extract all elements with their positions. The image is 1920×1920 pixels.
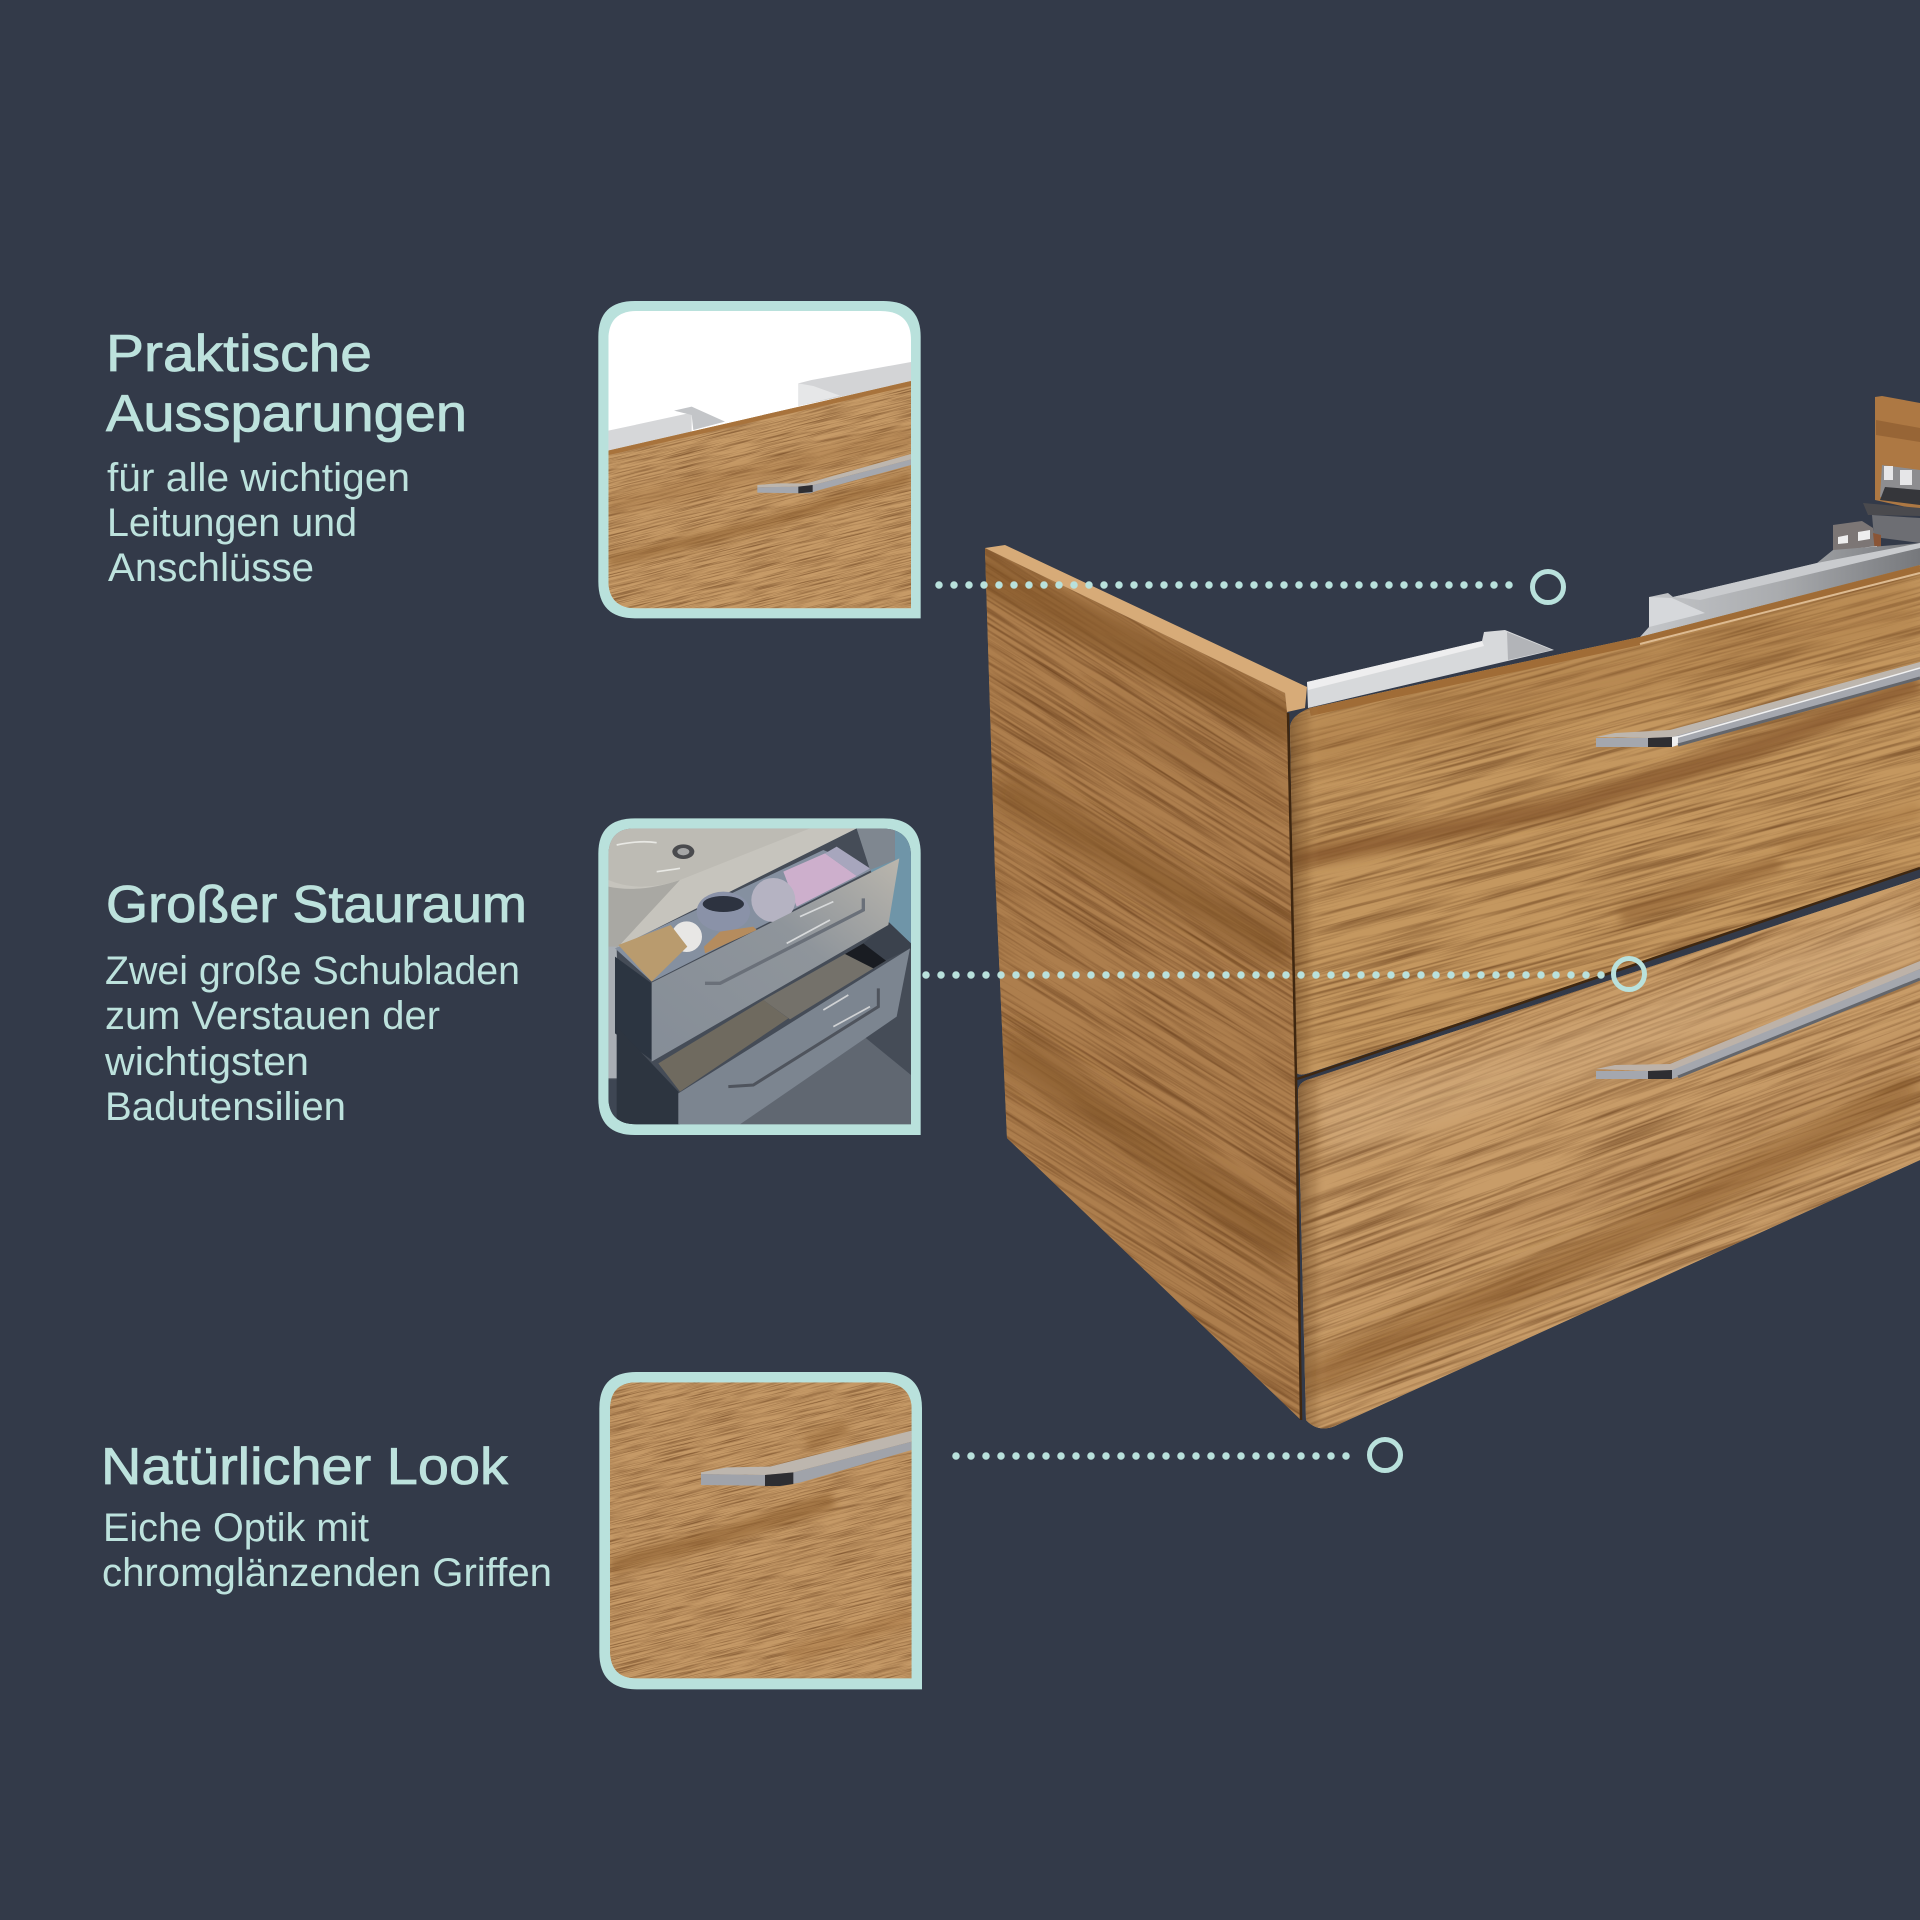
- description: [104, 949, 520, 1129]
- heading: Großer Stauraum: [106, 876, 527, 934]
- description: Leitungen und: [107, 501, 357, 545]
- description: chromglänzenden Griffen: [102, 1551, 552, 1595]
- upper drawer front: [1290, 565, 1920, 1075]
- text block: Natürlicher Look: [101, 1438, 552, 1595]
- heading: Natürlicher Look: [101, 1438, 509, 1496]
- panel: Look detail photo: [599, 1372, 922, 1690]
- description: Zwei große Schubladen: [105, 949, 520, 993]
- dotted leader line: Aussparungen: [939, 581, 1514, 589]
- panel: Stauraum detail photo: [598, 818, 921, 1135]
- dotted leader line: Stauraum: [926, 971, 1606, 979]
- heading: Aussparungen: [106, 385, 467, 443]
- cabinet seams: [1288, 713, 1920, 1420]
- description: für alle wichtigen: [107, 456, 410, 500]
- description: [107, 456, 410, 590]
- cabinet product illustration: [985, 396, 1920, 1466]
- description: zum Verstauen der: [105, 994, 440, 1038]
- lower handle: [1596, 961, 1920, 1079]
- text block: Praktische Aussparungen: [106, 325, 467, 590]
- description: Anschlüsse: [108, 546, 314, 590]
- heading: Praktische: [106, 325, 372, 383]
- lower drawer front: [1298, 878, 1920, 1428]
- description: Eiche Optik mit: [103, 1506, 369, 1550]
- marker ring: Look: [1370, 1440, 1400, 1470]
- description: [102, 1506, 552, 1595]
- aluminium rails: [1307, 543, 1920, 708]
- marker ring: Stauraum: [1614, 958, 1644, 990]
- description: wichtigsten: [104, 1040, 309, 1084]
- panel: Aussparungen detail photo: [598, 301, 921, 618]
- back panel and hinge: [1827, 396, 1920, 562]
- heading: [106, 325, 467, 443]
- text block: Großer Stauraum: [104, 876, 527, 1129]
- description: Badutensilien: [105, 1085, 346, 1129]
- side panel wood: [985, 548, 1300, 1419]
- side panel top edge: [985, 545, 1307, 712]
- marker ring: Aussparungen: [1532, 572, 1564, 602]
- dotted leader line: Look: [956, 1452, 1350, 1460]
- upper handle: [1596, 662, 1920, 747]
